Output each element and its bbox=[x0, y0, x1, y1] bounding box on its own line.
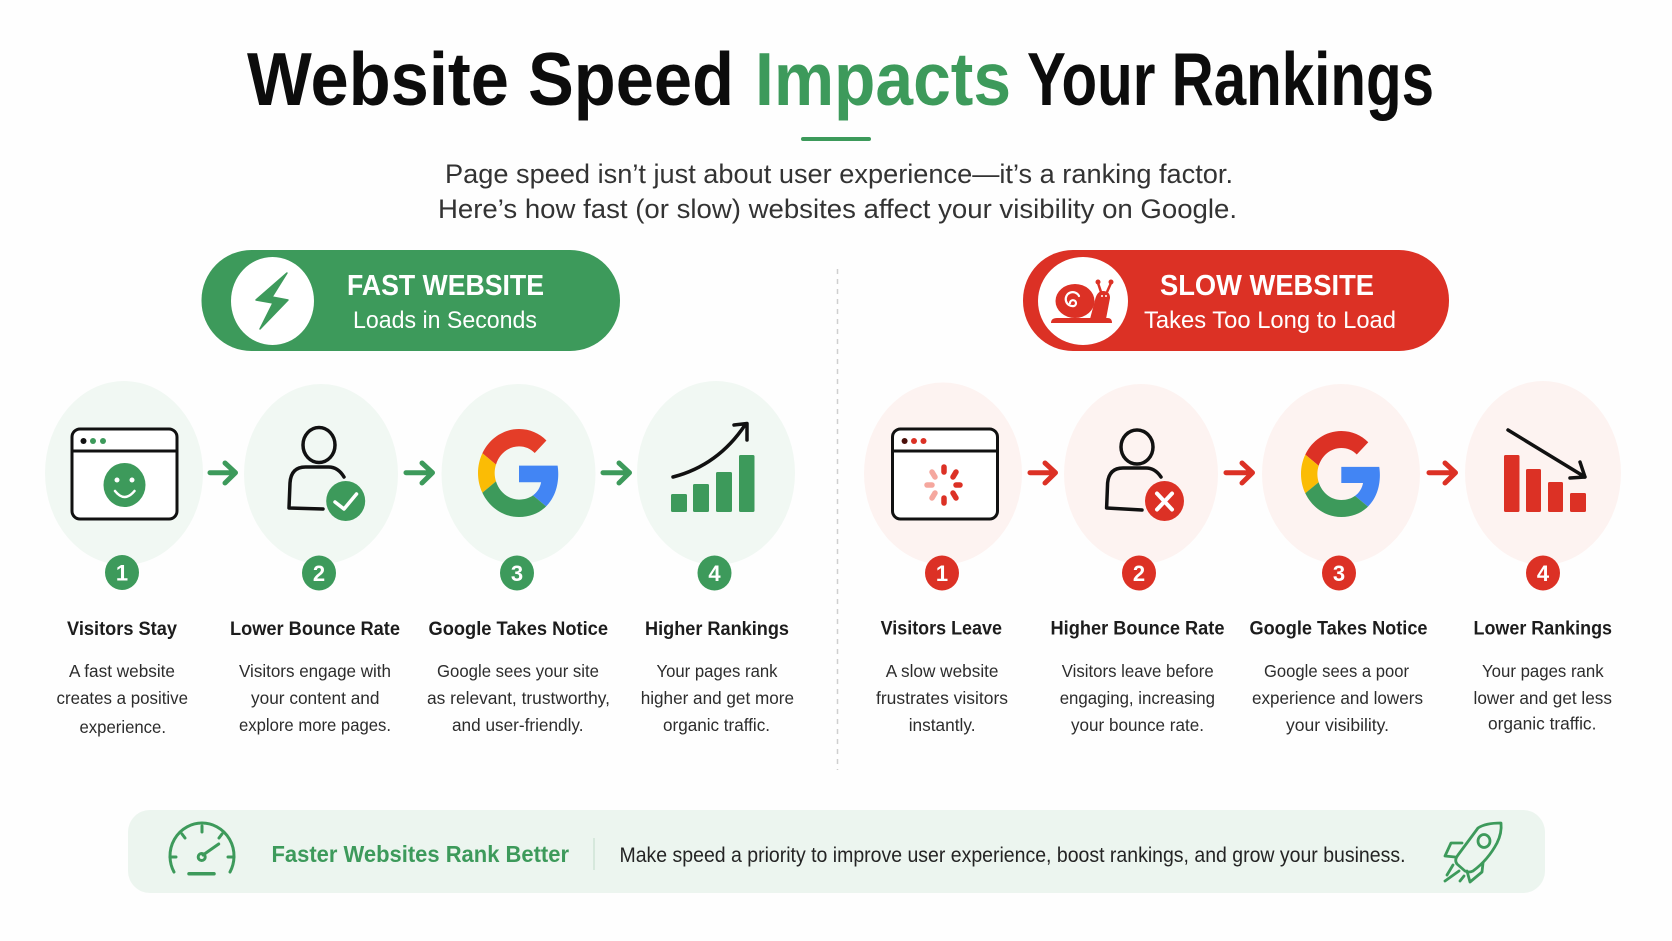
step 2: higher bounce rate bbox=[1050, 384, 1224, 735]
number badge 3: 3 bbox=[511, 561, 523, 586]
heading: Google Takes Notice bbox=[428, 619, 608, 640]
description bbox=[876, 661, 1008, 735]
heading: Visitors Stay bbox=[67, 619, 177, 640]
panel: slow website steps bbox=[864, 381, 1621, 735]
description: experience and lowers bbox=[1252, 688, 1423, 708]
number badge 3: 3 bbox=[1333, 561, 1345, 586]
description: higher and get more bbox=[641, 688, 794, 708]
icon: lightning bolt bbox=[256, 273, 288, 329]
description: creates a positive bbox=[56, 688, 188, 708]
icon: browser with spinner bbox=[892, 429, 998, 519]
icon: google G bbox=[1301, 431, 1380, 517]
title bbox=[247, 37, 1434, 121]
description: Visitors leave before bbox=[1062, 661, 1214, 681]
description bbox=[1252, 661, 1423, 735]
description: your content and bbox=[251, 688, 380, 708]
slow website heading: SLOW WEBSITE bbox=[1160, 270, 1374, 302]
number badge 3 bbox=[500, 556, 534, 590]
panel header: slow website bbox=[1023, 250, 1449, 351]
heading: Higher Rankings bbox=[645, 619, 789, 640]
number badge 1: 1 bbox=[936, 561, 948, 586]
heading: Visitors Leave bbox=[881, 618, 1002, 640]
description bbox=[56, 661, 188, 737]
subtitle bbox=[438, 159, 1237, 224]
heading: Lower Rankings bbox=[1474, 618, 1612, 640]
step 1: visitors stay bbox=[45, 381, 203, 737]
icon: google G bbox=[478, 429, 558, 517]
fast website subheading: Loads in Seconds bbox=[353, 307, 537, 334]
footer banner bbox=[128, 810, 1545, 893]
icon: rocket bbox=[1445, 823, 1501, 882]
number badge 2: 2 bbox=[1133, 561, 1145, 586]
description: A slow website bbox=[886, 661, 998, 681]
icon: rising bar chart bbox=[671, 424, 754, 512]
description bbox=[1474, 661, 1612, 734]
description: Google sees your site bbox=[437, 661, 599, 681]
number badge 1 bbox=[925, 556, 959, 590]
heading: Lower Bounce Rate bbox=[230, 619, 400, 640]
description: your bounce rate. bbox=[1071, 715, 1204, 735]
description: as relevant, trustworthy, bbox=[427, 688, 610, 708]
description: organic traffic. bbox=[663, 715, 770, 735]
number badge 2: 2 bbox=[313, 561, 325, 586]
arrow bbox=[1030, 463, 1056, 483]
number badge 4 bbox=[698, 556, 732, 590]
number badge 1 bbox=[105, 555, 139, 590]
icon: person with check bbox=[289, 428, 365, 521]
description bbox=[239, 661, 391, 735]
description: lower and get less bbox=[1474, 688, 1612, 708]
step 3: google takes notice bbox=[1250, 384, 1428, 735]
fast website heading: FAST WEBSITE bbox=[347, 270, 544, 302]
title: Website Speed bbox=[247, 37, 734, 121]
icon: snail bbox=[1051, 280, 1114, 323]
footer heading: Faster Websites Rank Better bbox=[272, 841, 569, 867]
description: A fast website bbox=[69, 661, 175, 681]
number badge 2 bbox=[302, 556, 336, 590]
number badge 4: 4 bbox=[1537, 561, 1550, 586]
description: explore more pages. bbox=[239, 715, 391, 735]
arrow bbox=[603, 463, 630, 483]
step 4: higher rankings bbox=[637, 381, 795, 735]
icon: person with cross bbox=[1107, 430, 1184, 521]
description: and user-friendly. bbox=[452, 715, 584, 735]
description: Google sees a poor bbox=[1264, 661, 1409, 681]
description: Your pages rank bbox=[656, 661, 778, 681]
step 2: lower bounce rate bbox=[230, 384, 400, 735]
arrow bbox=[406, 463, 432, 483]
step 4: lower rankings bbox=[1465, 381, 1621, 734]
description: engaging, increasing bbox=[1060, 688, 1215, 708]
icon: speedometer bbox=[170, 823, 234, 874]
description: instantly. bbox=[909, 715, 976, 735]
slow website subheading: Takes Too Long to Load bbox=[1144, 307, 1396, 334]
number badge 1: 1 bbox=[116, 560, 128, 586]
number badge 4 bbox=[1526, 556, 1560, 590]
subtitle: Here’s how fast (or slow) websites affect your visibility on Google. bbox=[438, 194, 1237, 224]
title: Your Rankings bbox=[1027, 37, 1434, 121]
description bbox=[1060, 661, 1215, 735]
description: frustrates visitors bbox=[876, 688, 1008, 708]
arrow bbox=[1226, 463, 1252, 483]
number badge 2 bbox=[1122, 556, 1156, 590]
number badge 4: 4 bbox=[708, 561, 721, 586]
title underline bbox=[801, 137, 871, 141]
description: your visibility. bbox=[1286, 715, 1389, 735]
arrow bbox=[210, 463, 236, 483]
arrow bbox=[1429, 463, 1456, 483]
description: experience. bbox=[80, 717, 166, 737]
description: Your pages rank bbox=[1482, 661, 1604, 681]
number badge 3 bbox=[1322, 556, 1356, 590]
heading: Higher Bounce Rate bbox=[1050, 618, 1224, 640]
description: Visitors engage with bbox=[239, 661, 391, 681]
step 3: google takes notice bbox=[427, 384, 610, 735]
description: organic traffic. bbox=[1488, 714, 1596, 734]
panel header: fast website bbox=[202, 250, 620, 351]
panel: fast website steps bbox=[45, 381, 795, 737]
description bbox=[427, 661, 610, 735]
description bbox=[641, 661, 794, 735]
subtitle: Page speed isn’t just about user experience—it’s a ranking factor. bbox=[445, 159, 1233, 189]
step 1: visitors leave bbox=[864, 382, 1022, 735]
heading: Google Takes Notice bbox=[1250, 618, 1428, 640]
footer message: Make speed a priority to improve user experience, boost rankings, and grow your business. bbox=[620, 843, 1406, 867]
title: Impacts bbox=[755, 37, 1011, 121]
icon: browser with smiley bbox=[72, 429, 177, 519]
icon: falling bar chart bbox=[1504, 430, 1586, 512]
